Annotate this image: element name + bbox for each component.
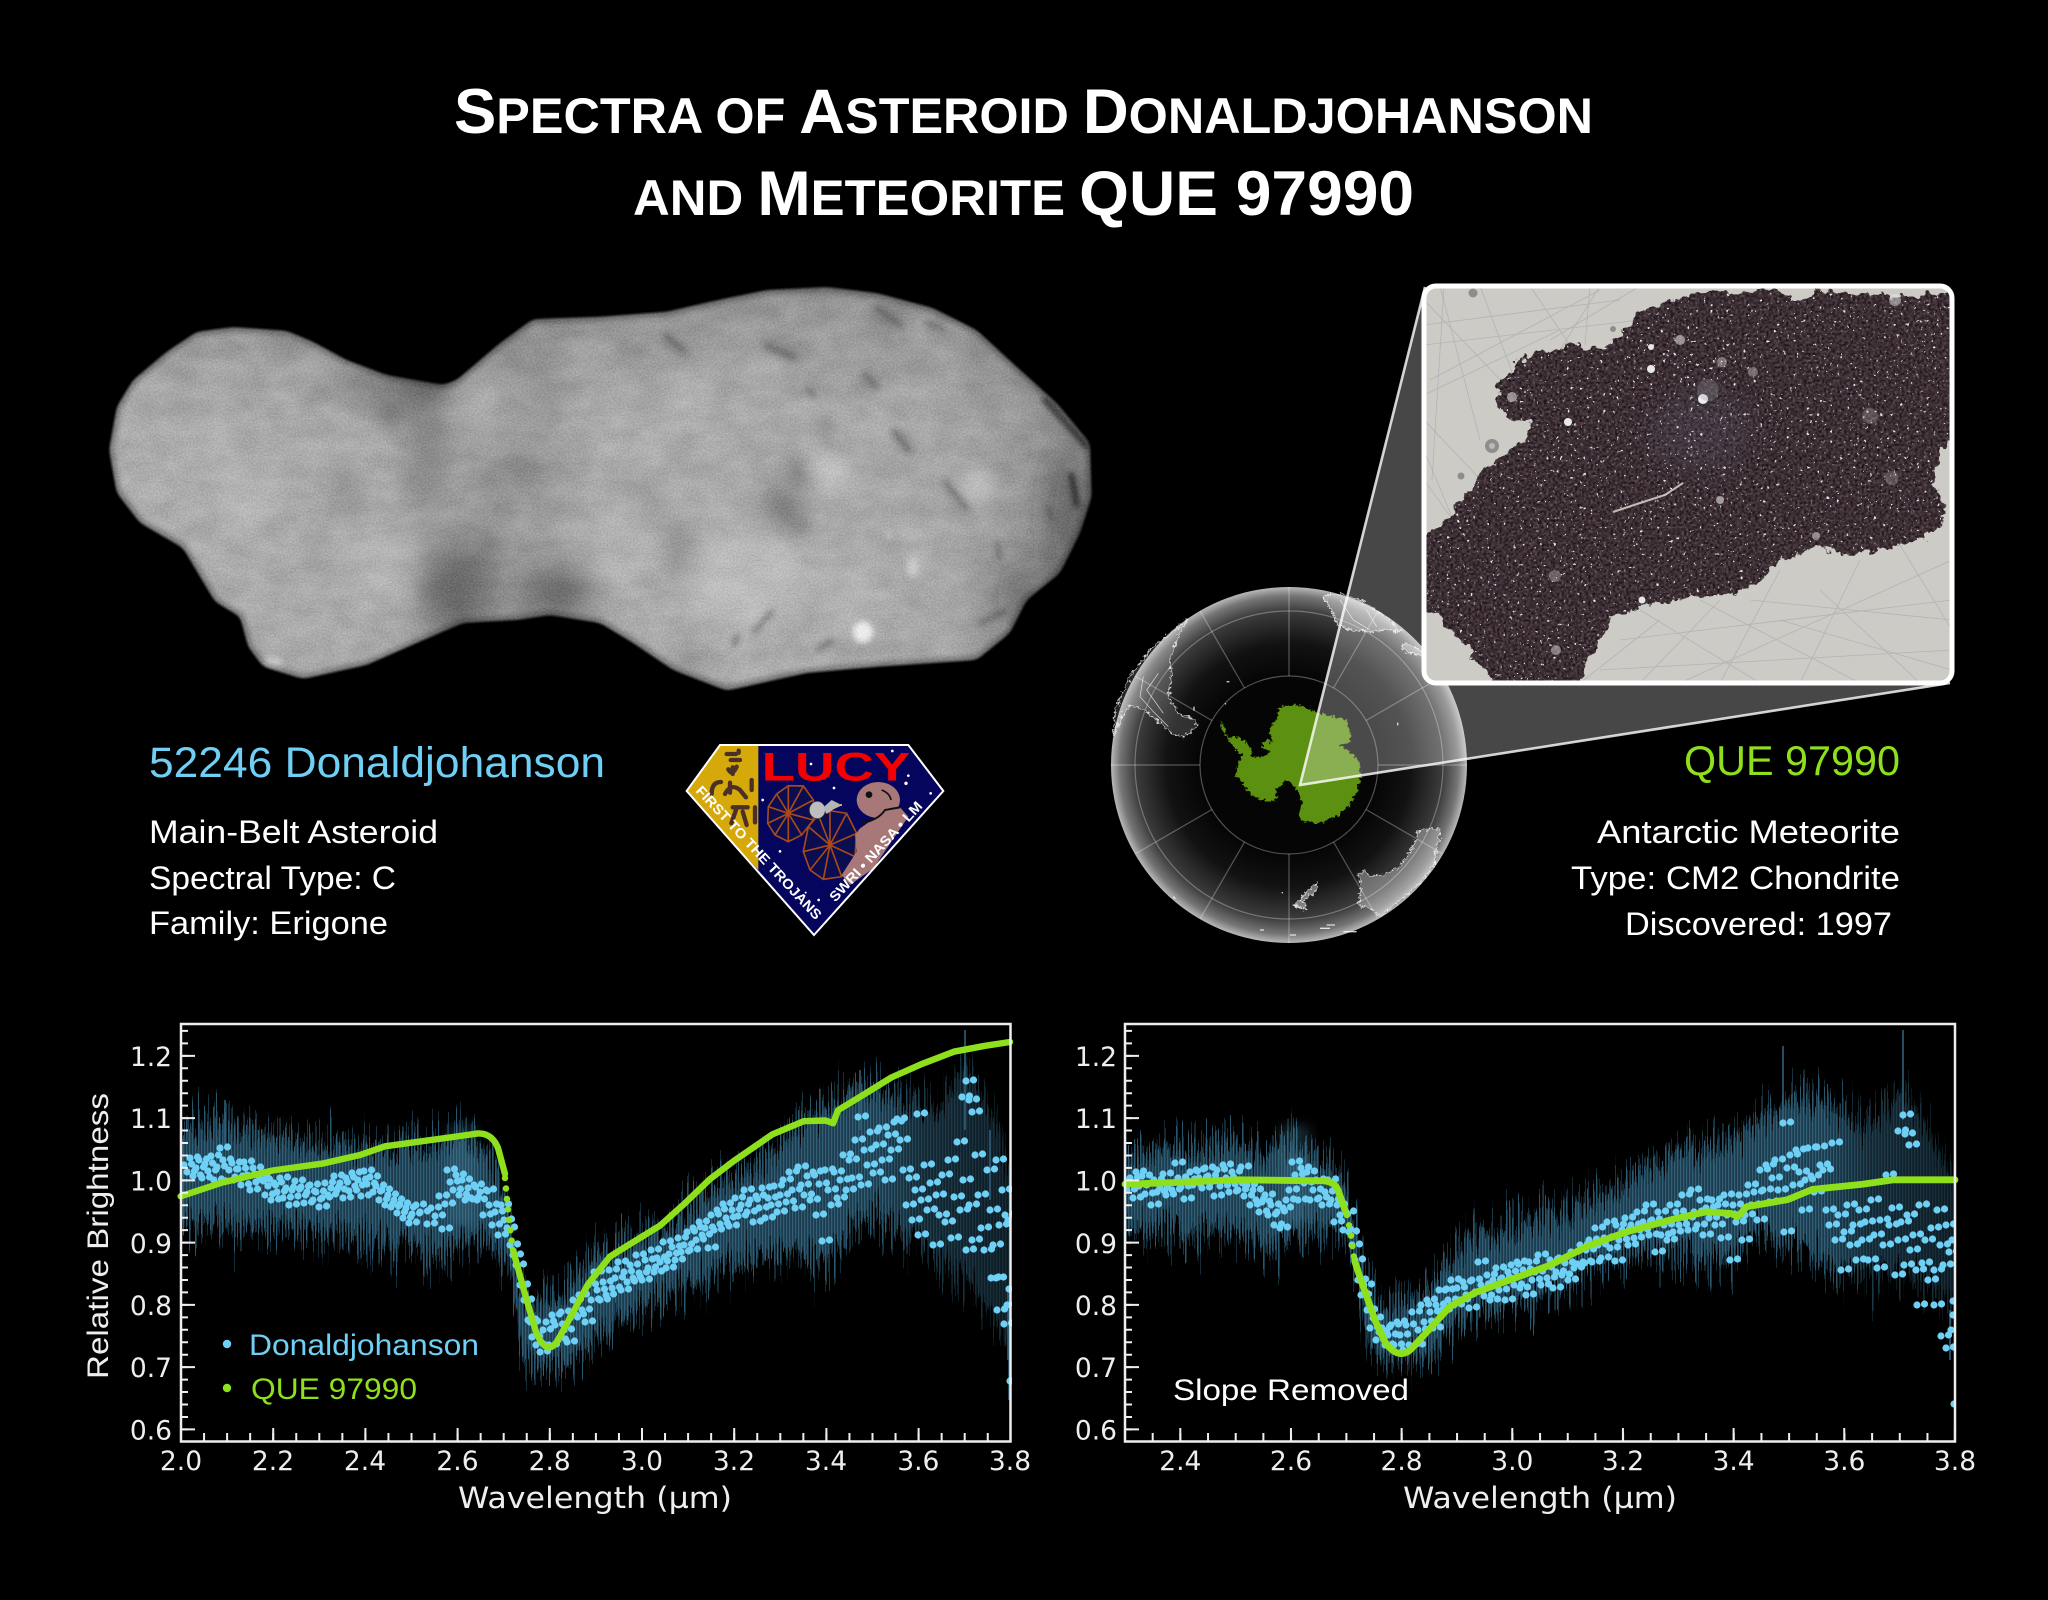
icon: solar arrays <box>768 786 857 879</box>
x axis labels <box>1159 1446 1976 1477</box>
x axis labels: 3.6 <box>1823 1446 1865 1477</box>
text block: Donaldjohanson facts <box>149 739 605 941</box>
text block: QUE 97990 facts <box>1571 737 1900 942</box>
badge text: first to the Trojans: FIRST TO THE TROJANS <box>693 782 825 923</box>
legend: QUE 97990 <box>251 1373 417 1406</box>
chart: spectra with slope <box>82 1024 1031 1515</box>
continents on globe <box>1113 593 1440 935</box>
title: AND METEORITE QUE 97990 <box>633 159 1414 229</box>
y axis labels: 0.7 <box>1075 1353 1117 1384</box>
icon: stars <box>761 750 932 901</box>
islands <box>1173 682 1398 935</box>
y axis labels: 1.0 <box>130 1166 172 1198</box>
line: family: Family: Erigone <box>149 905 388 941</box>
spectrum curve: after absorption <box>1355 1180 1955 1354</box>
error bars: Donaldjohanson <box>181 1026 1010 1439</box>
x axis labels: 3.4 <box>1713 1446 1755 1477</box>
graticule <box>1111 587 1467 943</box>
title <box>454 77 1593 229</box>
error bars: Donaldjohanson <box>1125 1026 1955 1439</box>
x axis title: Wavelength (µm) <box>1403 1481 1677 1515</box>
x axis labels: 3.4 <box>805 1446 847 1477</box>
x axis labels <box>160 1446 1031 1477</box>
y axis labels: 0.6 <box>1075 1416 1117 1446</box>
y axis labels: 0.8 <box>130 1291 172 1322</box>
y axis labels: 0.9 <box>130 1229 172 1260</box>
spectrum curve: after absorption <box>513 1042 1010 1347</box>
x axis labels: 2.2 <box>252 1446 294 1477</box>
chondrules in meteorite <box>1507 294 1901 655</box>
y axis title: Relative Brightness <box>82 1093 115 1379</box>
icon: Lucy hominin figures <box>712 751 755 825</box>
icon: Lucy spacecraft <box>809 800 842 819</box>
x axis labels: 3.0 <box>1491 1446 1533 1477</box>
asteroid photo: Donaldjohanson <box>108 286 1093 691</box>
x axis labels: 3.8 <box>989 1446 1031 1477</box>
x axis labels: 2.6 <box>436 1446 479 1477</box>
y axis labels: 0.8 <box>1075 1291 1117 1322</box>
spectrum curve: QUE 97990 slope removed <box>1125 1180 1345 1210</box>
line: asteroid class: Main-Belt Asteroid <box>149 814 438 850</box>
data points: Donaldjohanson <box>1127 1114 1962 1404</box>
icon: Trojan asteroid <box>842 782 908 885</box>
y axis labels <box>130 1042 172 1446</box>
chart: slope removed <box>1075 1024 1976 1515</box>
spectrum curve: QUE 97990 <box>181 1133 505 1196</box>
icon: Lucy mission badge <box>683 743 943 935</box>
y axis labels: 1.1 <box>130 1104 172 1135</box>
badge text: partners: SWRI • NASA • LM <box>826 798 925 905</box>
name: 52246 Donaldjohanson: 52246 Donaldjohanson <box>149 739 605 787</box>
x axis labels: 2.4 <box>1159 1446 1201 1477</box>
spectrum curve: steep dotted part <box>505 1178 512 1248</box>
x axis labels: 2.4 <box>344 1446 386 1477</box>
name: QUE 97990: QUE 97990 <box>1684 737 1900 784</box>
y axis labels: 0.9 <box>1075 1229 1117 1260</box>
y axis labels: 0.6 <box>130 1416 172 1446</box>
error spikes <box>1714 1030 1950 1360</box>
line: spectral type: Spectral Type: C <box>149 860 396 896</box>
x axis labels: 2.8 <box>529 1446 571 1477</box>
x axis labels: 3.2 <box>1602 1446 1644 1477</box>
error spikes <box>225 1030 1009 1400</box>
axes frame and ticks <box>180 1024 1010 1442</box>
y axis labels <box>1075 1042 1117 1446</box>
legend: Donaldjohanson <box>249 1329 479 1362</box>
data points: Donaldjohanson <box>184 1080 1018 1381</box>
x axis labels: 2.6 <box>1270 1446 1312 1477</box>
y axis labels: 1.0 <box>1075 1166 1117 1198</box>
Antarctica <box>1221 705 1361 823</box>
axes frame and ticks <box>1125 1024 1955 1442</box>
legend <box>223 1329 479 1406</box>
x axis title: Wavelength (µm) <box>458 1481 732 1515</box>
x axis labels: 3.0 <box>621 1446 663 1477</box>
line: meteorite class: Antarctic Meteorite <box>1597 814 1900 850</box>
y axis labels: 0.7 <box>130 1353 172 1384</box>
annotation: slope removed: Slope Removed <box>1173 1374 1409 1407</box>
x axis labels: 2.0 <box>160 1446 202 1477</box>
globe: Antarctica location <box>1111 587 1467 943</box>
photo inset: meteorite thin section <box>1416 286 1965 695</box>
y axis labels: 1.2 <box>130 1042 172 1073</box>
x axis labels: 2.8 <box>1381 1446 1423 1477</box>
country borders <box>1140 600 1377 727</box>
callout cone from Antarctica to meteorite <box>1300 287 1950 785</box>
spectrum curve: steep dotted part <box>1347 1215 1354 1258</box>
line: meteorite type: Type: CM2 Chondrite <box>1571 860 1900 896</box>
title: SPECTRA OF ASTEROID DONALDJOHANSON <box>454 77 1593 147</box>
x axis labels: 3.8 <box>1934 1446 1976 1477</box>
x axis labels: 3.2 <box>713 1446 755 1477</box>
y axis labels: 1.2 <box>1075 1042 1117 1073</box>
vein in meteorite <box>1613 483 1683 512</box>
line: discovery year: Discovered: 1997 <box>1625 906 1892 942</box>
x axis labels: 3.6 <box>897 1446 939 1477</box>
y axis labels: 1.1 <box>1075 1104 1117 1135</box>
badge title: LUCY: LUCY <box>762 746 911 790</box>
